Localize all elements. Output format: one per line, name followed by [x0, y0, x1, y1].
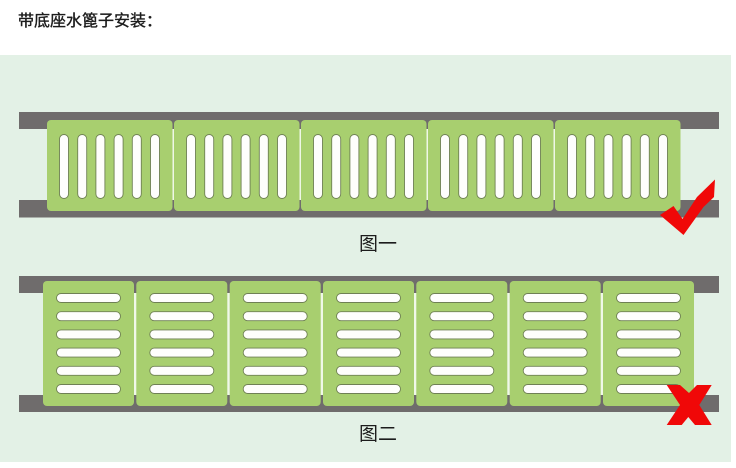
- bottom rail: [19, 395, 719, 412]
- caption: figure one: 图一: [359, 234, 397, 255]
- bottom rail: [19, 200, 719, 218]
- icon: red check mark: [660, 180, 715, 235]
- top rail: [19, 112, 719, 129]
- row of seven grates with horizontal slots: [43, 281, 694, 406]
- diagram 1: correct installation: [19, 112, 719, 255]
- diagram 2: incorrect installation: [19, 276, 719, 445]
- gaps between grates: [172, 129, 555, 200]
- title: 带底座水篦子安装：: [18, 12, 162, 30]
- caption: figure two: 图二: [359, 424, 397, 445]
- row of five grates with vertical slots: [47, 120, 680, 211]
- gaps between grates: [134, 293, 603, 395]
- icon: red cross mark: [667, 385, 712, 425]
- top rail: [19, 276, 719, 293]
